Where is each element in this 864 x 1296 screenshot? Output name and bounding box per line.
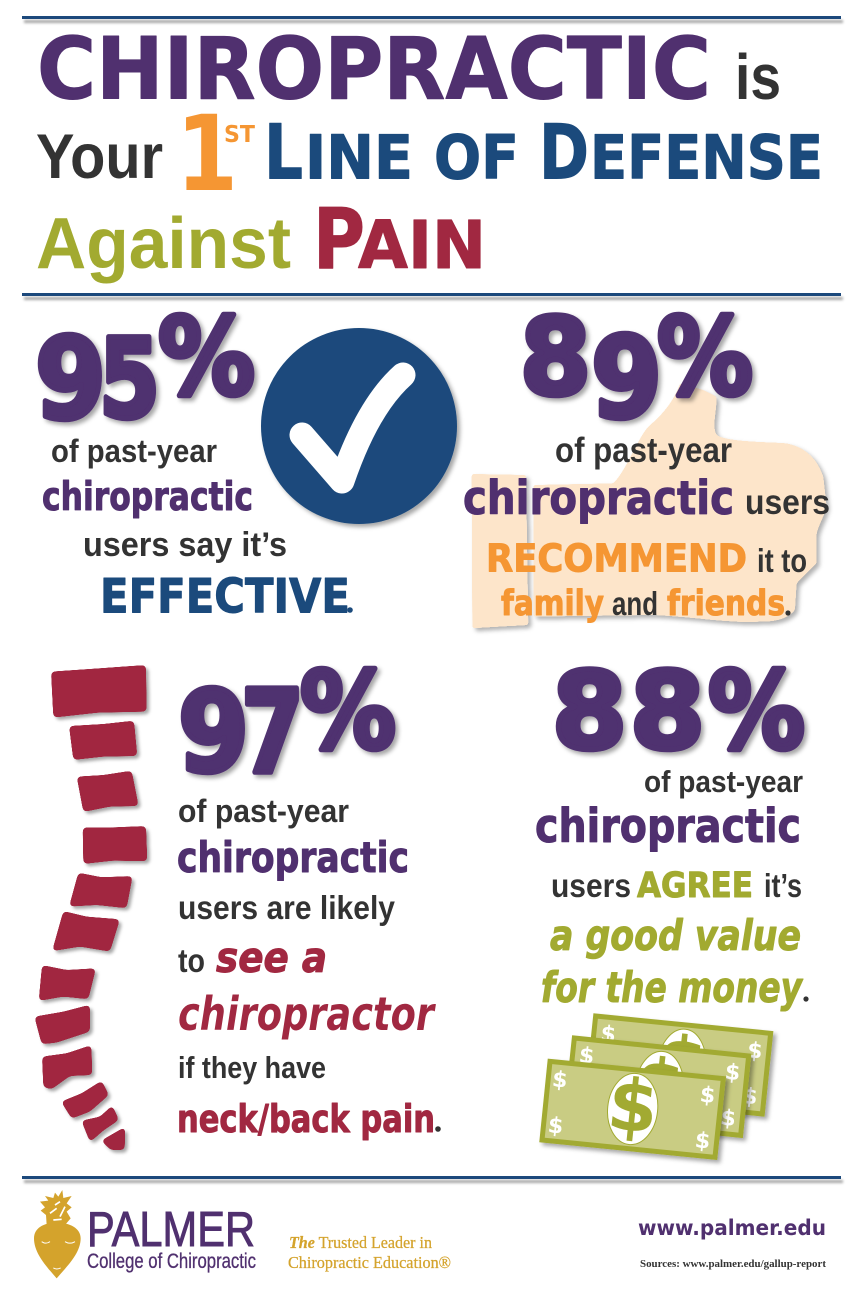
- text: 89 percent description: chiropractic: [463, 471, 734, 525]
- text: 89 percent description: RECOMMEND: [486, 536, 747, 580]
- bill: back: [587, 1016, 771, 1114]
- logo wordmark: [87, 1203, 256, 1273]
- text: 97 percent description: chiropractic: [177, 833, 409, 882]
- bill: middle: [566, 1038, 749, 1135]
- text: 95 percent description: users say it’s: [83, 526, 287, 564]
- title: L: [264, 108, 303, 196]
- icon: check mark circle: [261, 328, 457, 524]
- bill: back: $: [653, 1019, 710, 1106]
- title: ST: [224, 122, 255, 148]
- text: 89 percent description: of past-year: [555, 431, 732, 470]
- text: 88 percent description: AGREE: [637, 866, 753, 906]
- bill: middle: $: [578, 1043, 595, 1070]
- stat: 97%: 9: [178, 668, 249, 798]
- panel: 97 percent see a chiropractor: [34, 650, 441, 1150]
- stat: 88%: 8: [552, 650, 627, 773]
- stat: 95%: 5: [99, 315, 160, 443]
- stat: 89%: 9: [591, 314, 662, 444]
- tagline: Chiropractic Education®: [288, 1253, 451, 1272]
- title: INE: [305, 122, 413, 194]
- stat: 95%: 9: [35, 315, 106, 445]
- title: OF: [434, 122, 519, 194]
- stat: 88%: 8: [630, 650, 705, 773]
- website and sources: www.palmer.edu: [638, 1216, 826, 1240]
- text: 89 percent description: and: [612, 585, 658, 622]
- title: P: [313, 190, 365, 288]
- text: 97 percent description: to: [178, 942, 205, 979]
- title: D: [539, 108, 589, 196]
- title: [36, 20, 823, 288]
- bill: front: $: [694, 1128, 711, 1155]
- footer: [34, 1190, 827, 1278]
- stat: 89%: %: [657, 296, 753, 420]
- bill: front: $: [604, 1061, 662, 1150]
- stat: 88%: %: [708, 650, 805, 774]
- bill: back: $: [741, 1084, 759, 1110]
- text: 97 percent description: see a: [216, 933, 327, 982]
- bill: middle: $: [631, 1042, 688, 1128]
- bill: middle: $: [719, 1106, 737, 1132]
- title: Against: [36, 204, 291, 284]
- title: EFENSE: [590, 122, 823, 194]
- bill: front: $: [551, 1067, 569, 1094]
- text: 95 percent description: EFFECTIVE: [100, 570, 350, 624]
- icon: spine: [34, 665, 147, 1150]
- icon: stack of dollar bills: [542, 1016, 771, 1157]
- bill: back: $: [746, 1038, 764, 1065]
- text: 95 percent description: chiropractic: [42, 475, 253, 520]
- text: 88 percent description: [535, 764, 809, 1012]
- title: AIN: [358, 207, 486, 284]
- stat: 97%: 7: [241, 666, 304, 800]
- text: 95 percent description: of past-year: [51, 433, 217, 469]
- text: 88 percent description: chiropractic: [535, 799, 801, 853]
- text: 97 percent description: neck/back pain: [177, 1097, 435, 1141]
- text: 89 percent description: [463, 431, 830, 624]
- text: 89 percent description: users: [745, 483, 830, 522]
- bill: front: $: [547, 1113, 564, 1140]
- stat: 88%: [552, 650, 805, 774]
- text: 97 percent description: if they have: [178, 1050, 326, 1085]
- icon: Palmer logo: [34, 1190, 81, 1278]
- website and sources: [638, 1216, 827, 1270]
- icon: thumbs up: [472, 383, 827, 628]
- text: 88 percent description: of past-year: [644, 764, 803, 799]
- panel: 89 percent recommend: [463, 296, 830, 628]
- bill: front: [542, 1061, 723, 1157]
- bill: back: $: [599, 1022, 617, 1048]
- text: 89 percent description: friends: [667, 584, 785, 624]
- stat: 95%: [35, 296, 255, 445]
- bill: front: $: [699, 1083, 716, 1109]
- bill: middle: $: [724, 1060, 741, 1086]
- panel: 88 percent value: [535, 650, 809, 1157]
- title: Your: [36, 122, 163, 192]
- text: 95 percent description: [42, 433, 353, 624]
- stat: 95%: %: [158, 296, 255, 420]
- panel: 95 percent effective: [35, 296, 457, 624]
- logo wordmark: College of Chiropractic: [87, 1250, 256, 1273]
- logo wordmark: PALMER: [87, 1203, 255, 1257]
- title: 1: [176, 93, 238, 215]
- stat: 97%: [178, 650, 396, 800]
- text: 89 percent description: family: [501, 584, 604, 624]
- text: 97 percent description: users are likely: [178, 889, 396, 926]
- text: 97 percent description: [177, 793, 441, 1141]
- tagline: The Trusted Leader in: [289, 1233, 432, 1252]
- stat: 97%: %: [300, 650, 396, 774]
- text: 88 percent description: it’s: [764, 867, 802, 904]
- text: 89 percent description: it to: [757, 542, 807, 579]
- tagline: [288, 1233, 451, 1272]
- title: is: [735, 41, 781, 113]
- text: 88 percent description: a good value: [550, 911, 801, 960]
- stat: 89%: [520, 296, 753, 444]
- title: CHIROPRACTIC: [37, 20, 711, 120]
- stat: 89%: 8: [520, 296, 591, 419]
- text: 88 percent description: users: [551, 867, 631, 904]
- website and sources: Sources: www.palmer.edu/gallup-report: [640, 1259, 827, 1270]
- text: 97 percent description: chiropractor: [178, 987, 437, 1041]
- text: 97 percent description: of past-year: [178, 793, 349, 829]
